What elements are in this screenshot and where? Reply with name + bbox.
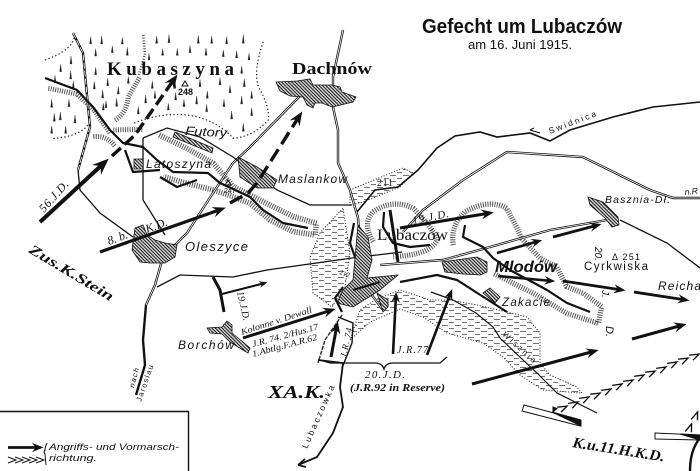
label: D.: D.: [603, 326, 615, 337]
title: [422, 16, 622, 52]
arrow: 19. J.D. south: [222, 283, 265, 294]
label: hill 248: [178, 81, 193, 97]
label: 19. J.D. south: 19.J.D.: [234, 290, 252, 322]
hachured ridges: [48, 35, 317, 235]
arrow: 8. b. K.D. dashed continuation: [230, 115, 300, 203]
label: J.R. 74: J.R. 74: [338, 327, 354, 358]
label: Futory: Futory: [185, 124, 228, 140]
label: 20. J.D.: 20.J.D.: [365, 369, 405, 381]
label: hill 247: 247: [224, 188, 236, 195]
attack arrows: [40, 78, 696, 428]
arrow: lower east: [632, 325, 683, 339]
label: hill 247: [224, 180, 236, 195]
label: Oleszyce: Oleszyce: [185, 239, 248, 254]
river Lubaczówka: [298, 360, 343, 467]
arrow: east of Mlodow 2: [553, 225, 598, 237]
label: X. A.K.: XA.K.: [267, 382, 325, 402]
label: Maslankow: Maslankow: [278, 172, 348, 186]
label: J.R. 77: J.R.77: [397, 345, 429, 356]
arrow: east of Mlodow 1: [497, 241, 539, 253]
village south of Lubaczów: [377, 293, 388, 312]
label: 20.: 20.: [592, 246, 603, 261]
label: 1. Abtlg. F.A.R. 62: 1.Abtlg.F.A.R.62: [251, 332, 319, 359]
dashed road south of Lubaczów: [318, 315, 342, 363]
legend box: [0, 412, 188, 471]
village: Dachnów: [276, 79, 356, 108]
villages: [132, 79, 619, 353]
label: Lubaczów: Lubaczów: [377, 227, 448, 244]
label: Swidnica: Swidnica: [547, 109, 598, 136]
label: J.R. 92 in Reserve: (J.R.92 in Reserve): [350, 383, 445, 394]
label: K. u. 11. H.K.D.: K.u.11.H.K.D.: [570, 435, 666, 465]
arrow: Kolonne v. Dewall: [243, 310, 332, 338]
label: 212: 212: [338, 268, 351, 280]
label: hill 251: Δ 251: [612, 252, 640, 262]
arrow: chevrons bottom right: [690, 416, 696, 428]
arrow: J.R. 77 right: [427, 292, 451, 355]
arrow: J.R. 77 left: [393, 295, 396, 354]
label: Reicha: Reicha: [658, 279, 700, 293]
arrow: J.R. 74: [331, 325, 337, 357]
label: Mlodow: Mlodów: [495, 259, 558, 276]
label: n.R: n.R: [684, 186, 698, 197]
label: Cyrkwiska: Cyrkwiska: [584, 261, 649, 273]
cavalry flag south: [522, 405, 581, 426]
arrow: Reicha: [634, 292, 686, 300]
thin roads: [78, 128, 700, 287]
arrow: Mlodow 4: [563, 281, 622, 290]
town: Lubaczów: [337, 225, 398, 307]
village: Zakacie: [483, 288, 500, 303]
label: Dachnów: Dachnów: [292, 59, 373, 78]
label: Zakacie: Zakacie: [501, 297, 550, 309]
legend arrow: [8, 446, 40, 449]
river Swidnica: [357, 102, 700, 212]
village: Borchów: [207, 321, 250, 353]
legend text: Angriffs- und Vormarsch-: [48, 442, 179, 453]
village: Latoszyna: [134, 159, 143, 169]
arrow: Wisznia crossing: [472, 351, 595, 384]
river Wisznia: [431, 292, 597, 413]
arrow: 8. b. K.D.: [100, 209, 222, 252]
label: Kubaszyna: Kubaszyna: [107, 59, 234, 80]
label: J.R. 74 2/Hus.17: J.R. 74. 2/Hus.17: [251, 322, 320, 349]
label: K.D.: K.D.: [142, 215, 169, 236]
label: Borchów: Borchów: [178, 338, 235, 352]
arrow: Mlodow 3: [498, 276, 552, 281]
village: Maslankow: [238, 157, 277, 188]
arrow: 19. J.D.: [400, 213, 490, 228]
label: 19. J.D.: 19.J.D.: [411, 208, 450, 227]
forest: Kubaszyna: [45, 35, 269, 138]
front lines: [45, 78, 590, 312]
village: Oleszyce: [132, 225, 177, 263]
village: Futory: [173, 132, 213, 153]
arrow: cavalry chevrons: [563, 356, 695, 408]
title: Gefecht um Lubaczów: [422, 16, 622, 38]
legend text second line: richtung.: [49, 453, 97, 464]
main roads: [73, 30, 700, 395]
label: hill 248: 248: [178, 87, 193, 97]
label: 211: 211: [377, 178, 393, 189]
label: J.: J.: [599, 289, 610, 298]
arrow: 56. J.D. dashed continuation: [112, 78, 175, 156]
label: 56. J.D.: 56.J.D.: [36, 177, 72, 215]
label: nach: nach: [127, 367, 141, 389]
label: Latoszyna: Latoszyna: [146, 157, 211, 171]
legend brace: [44, 443, 47, 465]
label: Jaroslau: Jaroslau: [134, 364, 155, 403]
village: Mlodow: [442, 257, 487, 275]
brace: 20. J.D.: [320, 357, 447, 369]
hachured hills east of Lubaczów: [367, 204, 602, 323]
title: am 16. Juni 1915.: [468, 38, 572, 52]
legend chevrons: [8, 457, 44, 463]
label: Kolonne v. Dewall: Kolonne v. Dewall: [238, 304, 314, 337]
marsh areas: [310, 168, 582, 393]
village: Basznia: [588, 197, 619, 227]
label: Wisznia: Wisznia: [501, 330, 538, 365]
cavalry flag east: [655, 433, 700, 471]
arrow: 56. J.D.: [40, 162, 105, 222]
label: 8. b.: 8. b.: [105, 227, 130, 248]
label: Lubaczówka: Lubaczowka: [300, 383, 337, 450]
label: Basznia-Dł.: Basznia-Dł.: [605, 194, 670, 206]
label: Zus. K. Stein: Zus.K.Stein: [25, 242, 116, 305]
